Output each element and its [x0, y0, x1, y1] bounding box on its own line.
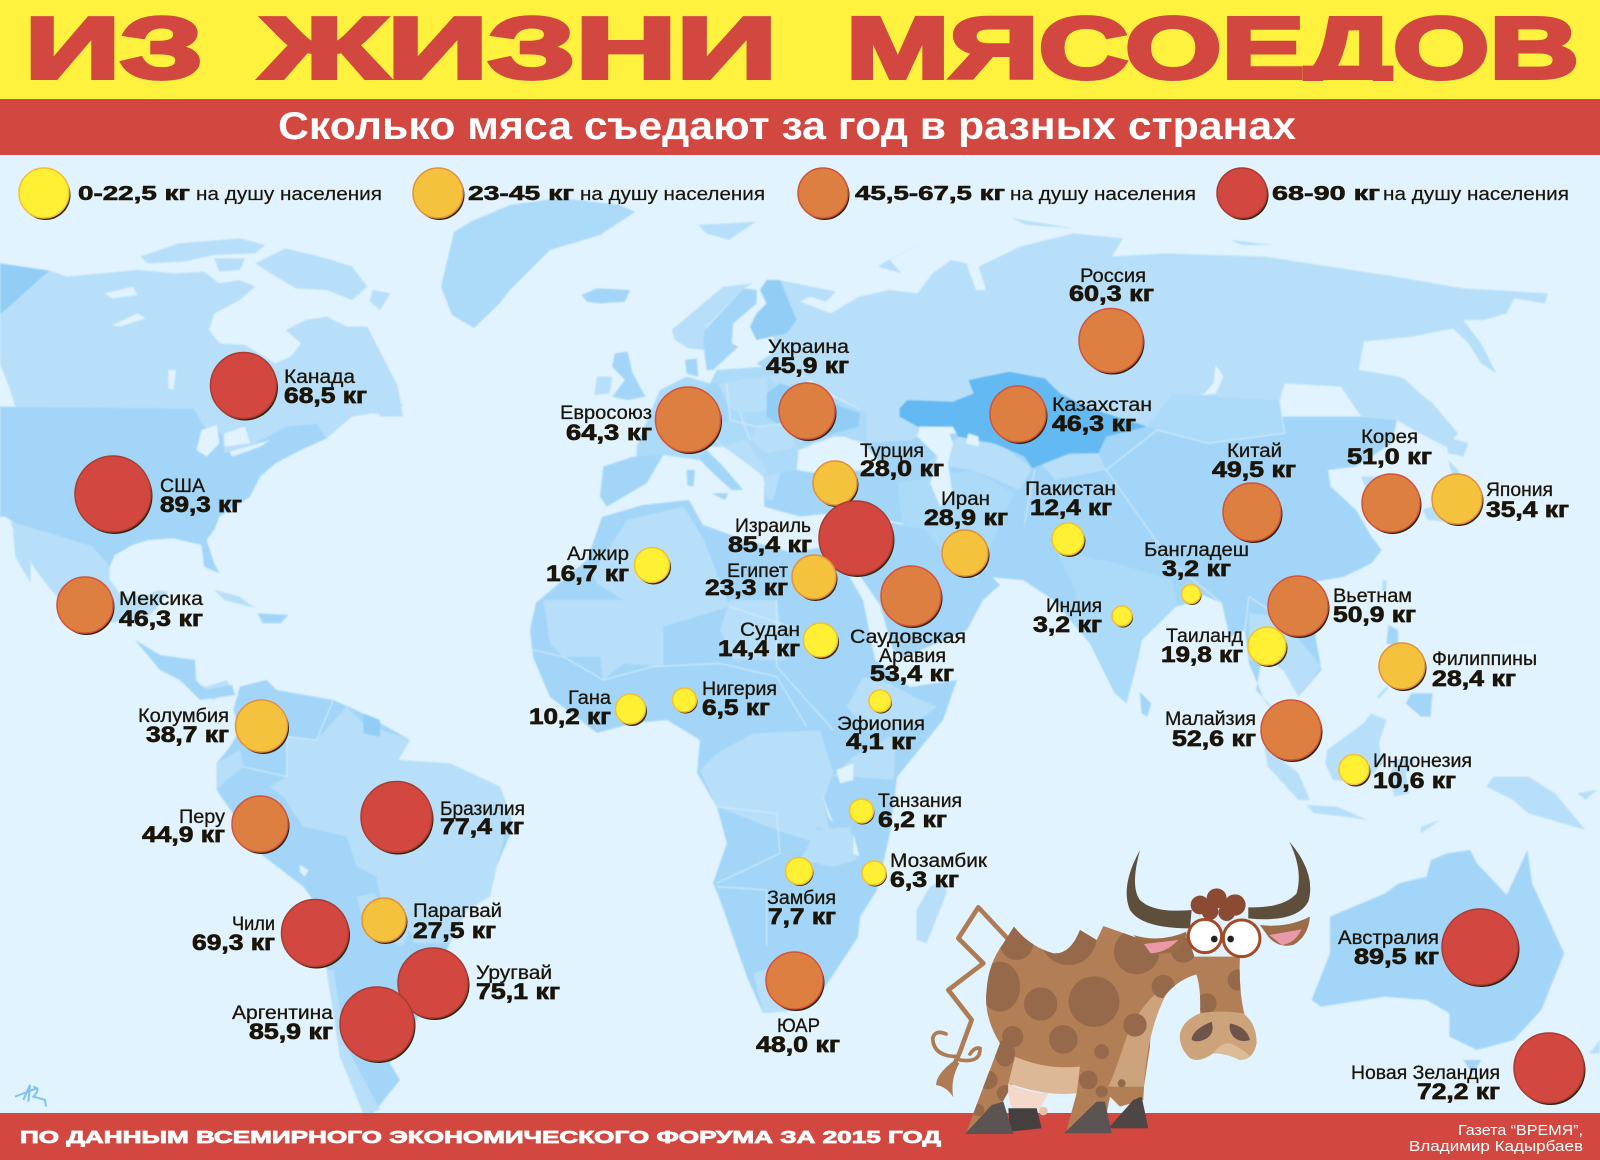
credit: [1409, 1122, 1583, 1155]
marker: Япония: [1432, 474, 1569, 526]
subtitle: Сколько мяса съедают за год в разных странах: [278, 105, 1296, 148]
marker: Украина: [766, 337, 849, 441]
marker: Саудовская Аравия: Аравия: [879, 646, 946, 667]
marker: Судан: Судан: [740, 620, 800, 641]
marker: Уругвай: 75,1 кг: [476, 979, 560, 1004]
footer band: [0, 1113, 1600, 1160]
north america and british isles: [0, 238, 645, 623]
marker: Алжир: 16,7 кг: [546, 561, 629, 586]
marker: Евросоюз: [560, 387, 722, 454]
marker: Украина: 45,9 кг: [766, 353, 849, 378]
credit: Газета “ВРЕМЯ”,: [1458, 1122, 1583, 1139]
marker: Бангладеш: Бангладеш: [1144, 540, 1249, 561]
marker: Бразилия: [361, 782, 525, 854]
marker: Египет: [705, 555, 838, 601]
europe: [600, 280, 920, 507]
marker: Китай: Китай: [1227, 441, 1282, 462]
marker: Перу: [142, 796, 290, 854]
marker: Япония: 35,4 кг: [1486, 497, 1569, 522]
marker: Замбия: 7,7 кг: [768, 904, 836, 929]
marker: Уругвай: [398, 948, 560, 1020]
marker: Китай: 49,5 кг: [1212, 457, 1296, 482]
marker: Мозамбик: [862, 851, 988, 892]
arctic islands: [698, 218, 1272, 273]
marker: Корея: 51,0 кг: [1347, 444, 1432, 469]
marker: Бразилия: 77,4 кг: [440, 814, 524, 839]
marker: Турция: 28,0 кг: [860, 456, 944, 481]
marker: Бразилия: Бразилия: [440, 799, 525, 820]
world map: [0, 198, 1600, 1113]
marker: ЮАР: ЮАР: [777, 1016, 820, 1037]
marker: Новая Зеландия: Новая Зеландия: [1351, 1063, 1500, 1084]
marker: Бангладеш: 3,2 кг: [1162, 556, 1231, 581]
marker: Мозамбик: Мозамбик: [890, 851, 988, 872]
marker: Украина: Украина: [768, 337, 849, 358]
marker: Австралия: 89,5 кг: [1354, 944, 1439, 969]
marker: Пакистан: 12,4 кг: [1030, 495, 1112, 520]
marker: США: [75, 456, 242, 534]
marker: Парагвай: 27,5 кг: [413, 918, 496, 943]
marker: Новая Зеландия: [1351, 1033, 1586, 1105]
marker: Колумбия: [138, 700, 289, 754]
marker: Чили: [192, 900, 350, 968]
marker: Саудовская Аравия: [850, 566, 966, 686]
marker: Парагвай: [362, 898, 502, 944]
legend item: 23-45 кг: [413, 168, 765, 220]
marker: Израиль: [728, 501, 894, 577]
marker: Корея: [1347, 427, 1432, 534]
title: МЯСОЕДОВ: [846, 0, 1579, 97]
credit: Владимир Кадырбаев: [1409, 1138, 1583, 1155]
marker: Турция: Турция: [860, 441, 924, 462]
marker: Чили: Чили: [232, 914, 275, 935]
legend item: 0-22,5 кг: [19, 168, 382, 220]
marker: Пакистан: Пакистан: [1025, 479, 1116, 500]
marker: Малайзия: Малайзия: [1165, 709, 1256, 730]
marker: Таиланд: Таиланд: [1166, 626, 1243, 647]
marker: Филиппины: 28,4 кг: [1432, 666, 1516, 691]
marker: Эфиопия: [837, 690, 925, 754]
marker: Иран: [924, 489, 1008, 578]
marker: Колумбия: 38,7 кг: [146, 722, 229, 747]
legend item: 23-45 кг: 23-45 кг: [468, 183, 574, 205]
marker: Танзания: 6,2 кг: [878, 807, 947, 832]
title band: [0, 0, 1600, 99]
marker: Мозамбик: 6,3 кг: [890, 867, 959, 892]
marker: Япония: Япония: [1486, 480, 1553, 501]
marker: Индия: Индия: [1046, 596, 1102, 617]
marker: Филиппины: Филиппины: [1432, 649, 1537, 670]
marker: Пакистан: [1025, 479, 1116, 557]
marker: Израиль: Израиль: [735, 516, 811, 537]
marker: Австралия: Австралия: [1338, 928, 1439, 949]
marker: Судан: [718, 620, 839, 661]
marker: Аргентина: [232, 987, 416, 1063]
legend item: 45,5-67,5 кг: 45,5-67,5 кг: [855, 183, 1005, 205]
africa: [530, 500, 957, 1013]
legend item: 0-22,5 кг: 0-22,5 кг: [78, 183, 190, 205]
marker: Россия: Россия: [1080, 266, 1146, 287]
legend item: 45,5-67,5 кг: на душу населения: [1010, 184, 1196, 204]
marker: Бангладеш: [1144, 540, 1249, 605]
marker: Алжир: [546, 544, 671, 586]
australia and new zealand: [1312, 850, 1600, 1073]
legend item: 68-90 кг: на душу населения: [1383, 184, 1569, 204]
subtitle band: [0, 99, 1600, 155]
marker: Индонезия: Индонезия: [1373, 751, 1472, 772]
marker: Танзания: [850, 791, 962, 832]
title: ИЗ: [25, 0, 203, 97]
title: [30, 15, 1576, 81]
marker: Перу: 44,9 кг: [142, 822, 225, 847]
legend: [19, 168, 1569, 220]
marker: Евросоюз: Евросоюз: [560, 403, 652, 424]
marker: Аргентина: Аргентина: [232, 1003, 333, 1024]
marker: Вьетнам: [1268, 576, 1416, 638]
marker: США: США: [160, 476, 205, 497]
marker: Малайзия: [1165, 700, 1322, 762]
marker: Казахстан: [990, 386, 1152, 444]
marker: Канада: Канада: [284, 367, 355, 388]
marker: Индия: 3,2 кг: [1033, 612, 1102, 637]
marker: Корея: Корея: [1361, 427, 1418, 448]
marker: Евросоюз: 64,3 кг: [566, 420, 652, 445]
southeast asia islands: [1140, 580, 1597, 833]
marker: Индонезия: [1339, 751, 1472, 793]
marker: Уругвай: Уругвай: [476, 963, 552, 984]
marker: Индонезия: 10,6 кг: [1373, 768, 1456, 793]
marker: Канада: 68,5 кг: [284, 383, 367, 408]
marker: Турция: [813, 441, 944, 507]
marker: Эфиопия: 4,1 кг: [846, 729, 916, 754]
arabia: [845, 520, 1000, 657]
marker: Гана: Гана: [568, 688, 611, 709]
legend item: 68-90 кг: 68-90 кг: [1272, 183, 1380, 205]
marker: Австралия: [1338, 909, 1520, 987]
marker: Саудовская Аравия: Саудовская: [850, 627, 966, 648]
marker: Канада: [210, 352, 367, 420]
marker: Новая Зеландия: 72,2 кг: [1417, 1079, 1500, 1104]
marker: Замбия: Замбия: [767, 888, 836, 909]
marker: Перу: Перу: [179, 807, 226, 828]
marker: Мексика: Мексика: [119, 589, 203, 610]
greenland: [441, 198, 635, 328]
marker: Гана: 10,2 кг: [529, 704, 611, 729]
marker: Филиппины: [1379, 643, 1537, 691]
marker: Китай: [1212, 441, 1296, 543]
marker: Казахстан: 46,3 кг: [1052, 411, 1136, 436]
legend item: 68-90 кг: [1217, 168, 1569, 220]
marker: Иран: 28,9 кг: [924, 505, 1008, 530]
marker: Замбия: [767, 858, 836, 929]
signature mark: [15, 1085, 46, 1107]
marker: Алжир: Алжир: [567, 544, 629, 565]
marker: Парагвай: Парагвай: [413, 901, 502, 922]
marker: Нигерия: [672, 679, 777, 720]
eurasia: [764, 233, 1548, 730]
source note: ПО ДАННЫМ ВСЕМИРНОГО ЭКОНОМИЧЕСКОГО ФОРУМА ЗА 2015 ГОД: [20, 1127, 942, 1147]
marker: ЮАР: 48,0 кг: [756, 1032, 840, 1057]
marker: Казахстан: Казахстан: [1052, 395, 1152, 416]
marker: Мексика: 46,3 кг: [119, 606, 203, 631]
marker: Малайзия: 52,6 кг: [1172, 726, 1256, 751]
legend item: 23-45 кг: на душу населения: [580, 184, 765, 204]
marker: Чили: 69,3 кг: [192, 930, 275, 955]
marker: ЮАР: [756, 952, 840, 1057]
marker: Израиль: 85,4 кг: [728, 532, 812, 557]
marker: Эфиопия: Эфиопия: [837, 714, 925, 735]
marker: Мексика: [57, 577, 203, 635]
marker: Гана: [529, 688, 647, 729]
marker: Колумбия: Колумбия: [138, 706, 229, 727]
marker: Иран: Иран: [941, 489, 990, 510]
marker: Россия: [1069, 266, 1154, 374]
marker: Россия: 60,3 кг: [1069, 281, 1154, 306]
marker: Судан: 14,4 кг: [718, 636, 800, 661]
marker: Нигерия: 6,5 кг: [702, 695, 770, 720]
marker: Танзания: Танзания: [878, 791, 962, 812]
marker: Саудовская Аравия: 53,4 кг: [870, 661, 954, 686]
marker: Вьетнам: 50,9 кг: [1333, 602, 1416, 627]
cow illustration: [933, 842, 1310, 1134]
marker: Египет: Египет: [727, 561, 788, 582]
marker: США: 89,3 кг: [160, 492, 242, 517]
legend item: 0-22,5 кг: на душу населения: [196, 184, 382, 204]
marker: Вьетнам: Вьетнам: [1333, 586, 1412, 607]
marker: Таиланд: [1161, 626, 1288, 667]
marker: Аргентина: 85,9 кг: [249, 1019, 333, 1044]
title: ЖИЗНИ: [259, 0, 777, 97]
legend item: 45,5-67,5 кг: [798, 168, 1196, 220]
central america: [135, 640, 235, 700]
marker: Нигерия: Нигерия: [702, 679, 777, 700]
marker: Таиланд: 19,8 кг: [1161, 642, 1243, 667]
marker: Египет: 23,3 кг: [705, 575, 788, 600]
marker: Индия: [1033, 596, 1133, 637]
south america: [177, 680, 513, 1113]
country markers: [57, 266, 1586, 1105]
